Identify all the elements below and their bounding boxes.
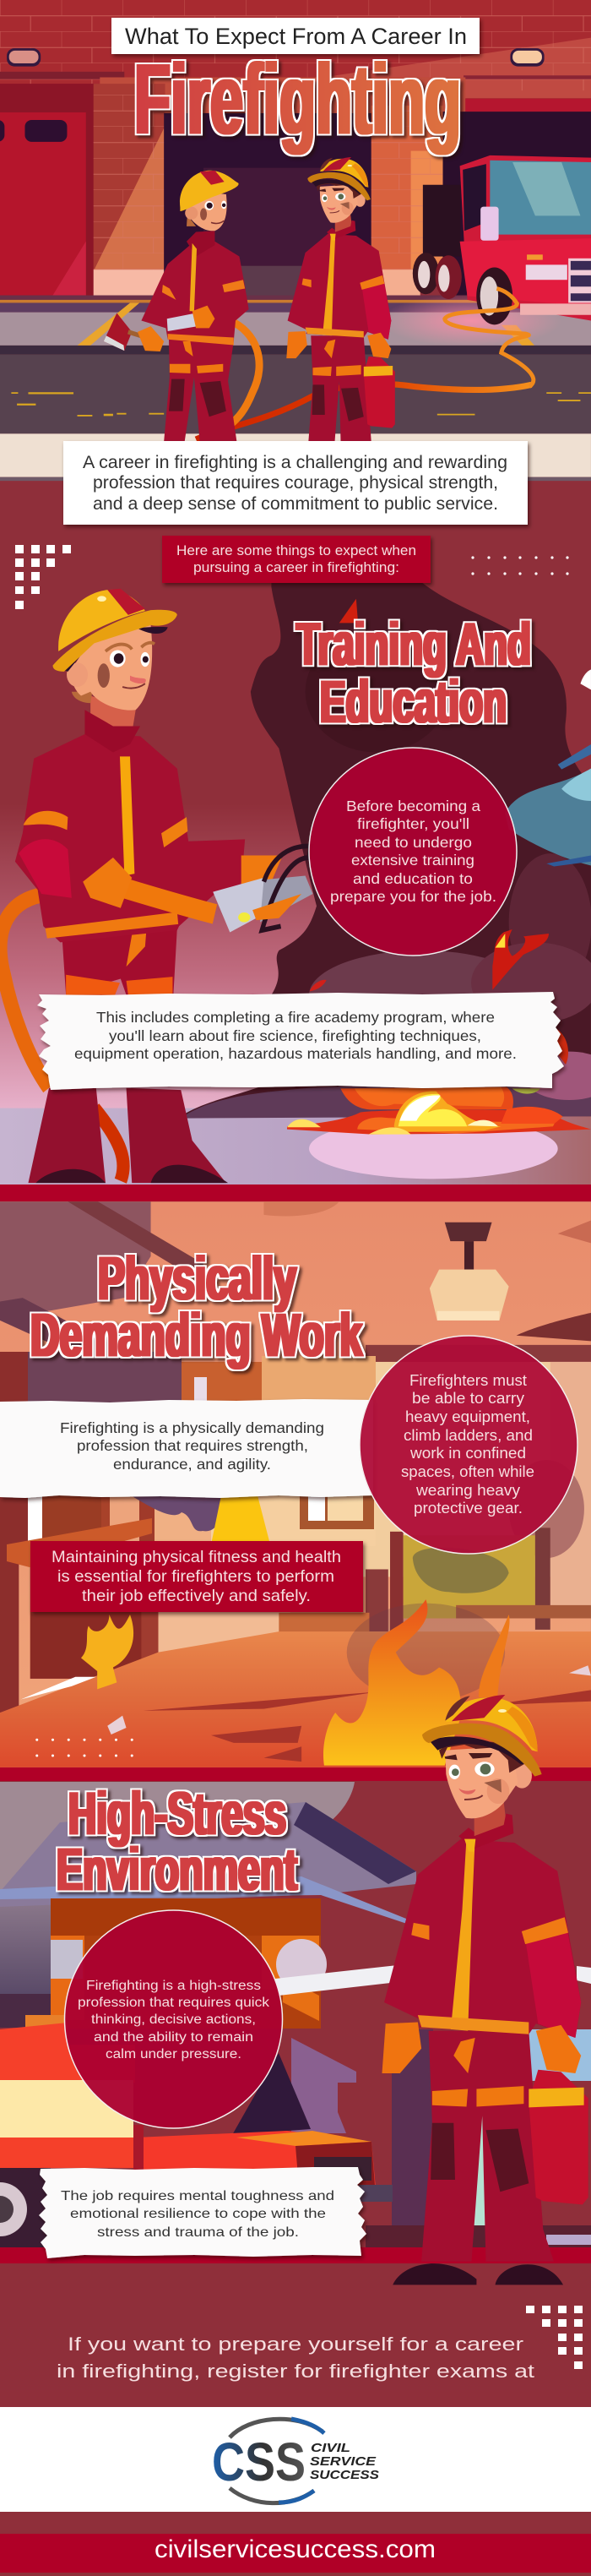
circle: carrying equipment: heavy equipment, — [405, 1408, 530, 1425]
lavender block and dark wedge — [232, 2038, 356, 2135]
logo: civil service success: SUCCESS — [310, 2468, 379, 2482]
logo: civil service success: SERVICE — [310, 2454, 377, 2469]
water splash — [505, 669, 591, 866]
right garage opening — [443, 99, 591, 300]
fire truck — [413, 155, 591, 324]
circle: high stress — [64, 1910, 282, 2128]
section 3 scene: burning room — [0, 1201, 591, 1767]
title banner: What To Expect From A Career In — [125, 24, 467, 49]
background column and gaps — [366, 2029, 591, 2247]
circle: carrying equipment: spaces, often while — [401, 1463, 534, 1480]
firefighter with extinguisher, large — [382, 1695, 588, 2285]
torn note: mental toughness: The job requires mental toughness and — [61, 2189, 334, 2203]
decorative dots lower left — [35, 1739, 133, 1757]
torn band: physical demands: Firefighting is a physically demanding — [60, 1419, 324, 1436]
bar under section 2 — [0, 1185, 591, 1201]
red box: fitness: Maintaining physical fitness and health — [52, 1548, 341, 1566]
smoke cloud — [181, 538, 591, 1119]
torn note: fire academy: you'll learn about fire science, firefighting techniques, — [109, 1027, 481, 1044]
logo: civil service success: CSS — [212, 2432, 306, 2492]
logo band — [0, 2407, 591, 2512]
small flame left — [21, 1615, 133, 1699]
circle: carrying equipment: work in confined — [409, 1445, 526, 1462]
torn note: fire academy — [37, 992, 564, 1090]
logo: civil service success: CIVIL — [311, 2441, 350, 2455]
grey sky disc — [0, 1782, 355, 1893]
circle: carrying equipment: wearing heavy — [415, 1482, 520, 1499]
central doorway — [164, 113, 372, 300]
heading: physically demanding work: Demanding Work — [30, 1302, 363, 1370]
heading: high-stress environment: Environment — [57, 1837, 297, 1903]
heading: physically demanding work: Physically — [98, 1245, 296, 1313]
circle: high stress: thinking, decisive actions, — [91, 2012, 256, 2027]
circle: carrying equipment: protective gear. — [414, 1500, 523, 1517]
decorative white squares bottom right — [526, 2306, 583, 2369]
closing call to action: If you want to prepare yourself for a career — [68, 2334, 524, 2355]
red box: fitness: is essential for firefighters to perform — [57, 1567, 334, 1586]
circle: high stress: profession that requires quick — [78, 1996, 269, 2010]
room details behind the text band — [0, 1352, 376, 1567]
torn band: physical demands — [0, 1399, 373, 1498]
hero illustration: fire station — [0, 0, 591, 481]
torn note: fire academy: This includes completing a fire academy program, where — [96, 1009, 495, 1026]
circle: training text: firefighter, you'll — [357, 815, 469, 832]
section 4 scene: street and truck — [0, 1782, 591, 2263]
intro text card: and a deep sense of commitment to public service. — [93, 494, 498, 514]
hoses on road — [196, 288, 534, 439]
torn note: mental toughness: stress and trauma of the job. — [97, 2225, 299, 2240]
circle: carrying equipment: Firefighters must — [409, 1372, 527, 1389]
circle: carrying equipment — [360, 1336, 577, 1554]
circle: high stress: and the ability to remain — [94, 2030, 253, 2045]
circle: training text — [309, 748, 517, 956]
decorative white squares top left — [15, 545, 71, 609]
right window — [279, 1528, 591, 1633]
intro text card — [63, 441, 528, 525]
lower left door panel — [0, 1524, 158, 1713]
intro text card: profession that requires courage, physical strength, — [93, 473, 498, 493]
wall areas — [158, 1362, 591, 1656]
circle: carrying equipment: climb ladders, and — [404, 1427, 533, 1444]
title banner — [111, 18, 480, 54]
brick pillar left — [94, 84, 165, 300]
circle: carrying equipment: be able to carry — [412, 1390, 524, 1407]
torn note: mental toughness — [39, 2167, 366, 2258]
circle: training text: need to undergo — [355, 834, 472, 851]
logo: civil service success — [212, 2419, 379, 2503]
red box: fitness — [30, 1541, 363, 1612]
wall lamps — [7, 48, 545, 67]
torn note: fire academy: equipment operation, hazardous materials handling, and more. — [74, 1045, 517, 1062]
ground layers — [0, 294, 591, 481]
torn band: physical demands: endurance, and agility. — [113, 1456, 271, 1473]
firefighter with extinguisher — [286, 157, 395, 471]
circle: training text: and education to — [353, 870, 473, 887]
brick pillar right — [371, 106, 443, 300]
decorative dots top right — [471, 556, 569, 575]
red box: fitness: their job effectively and safely. — [82, 1587, 311, 1605]
red truck — [0, 2023, 393, 2247]
circle: training text: Before becoming a — [346, 798, 480, 814]
website footer bar — [0, 2534, 591, 2573]
circle: high stress: Firefighting is a high-stress — [86, 1979, 261, 1993]
bar under section 3 — [0, 1767, 591, 1781]
left garage door — [0, 84, 100, 297]
circle: training text: prepare you for the job. — [330, 888, 496, 905]
lead-in red label — [162, 536, 431, 583]
torn band: physical demands: profession that requires strength, — [77, 1437, 308, 1454]
firefighter spraying hose — [0, 589, 313, 1183]
fire curl and ground fire — [287, 929, 591, 1135]
orange building — [25, 1898, 327, 2029]
floor — [0, 1631, 591, 1767]
circle: training text: extensive training — [351, 852, 474, 869]
big flame right — [323, 1599, 510, 1766]
website footer bar: civilservicesuccess.com — [155, 2535, 436, 2563]
torn note: mental toughness: emotional resilience to cope with the — [70, 2207, 326, 2221]
closing call to action: in firefighting, register for firefighter exams at — [57, 2361, 535, 2382]
circle: high stress: calm under pressure. — [106, 2047, 241, 2061]
section 2 scene: training — [0, 528, 591, 1185]
ceiling smoke and beams — [0, 1201, 591, 1396]
ceiling lamp — [430, 1223, 509, 1321]
white streak — [275, 1964, 591, 1996]
lead-in red label: Here are some things to expect when — [176, 543, 416, 558]
lead-in red label: pursuing a career in firefighting: — [193, 560, 399, 575]
firefighter with axe and hose — [104, 171, 249, 441]
roof — [0, 1802, 416, 1926]
heading: high-stress environment: High-Stress — [68, 1781, 286, 1848]
intro text card: A career in firefighting is a challenging and rewarding — [83, 453, 507, 472]
